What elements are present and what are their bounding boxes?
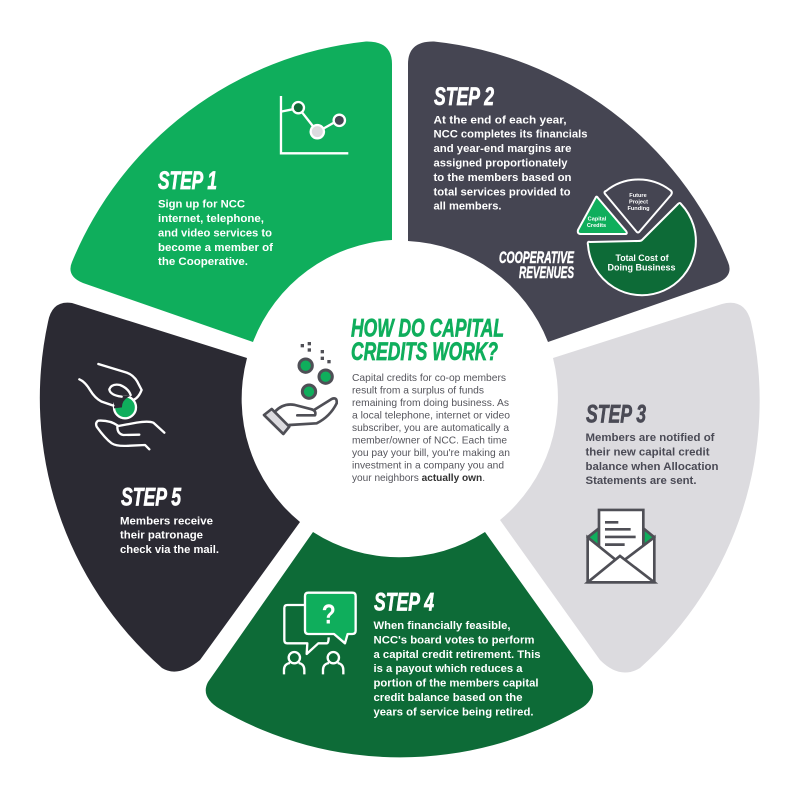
step 2 text: NCC completes its financials — [434, 129, 588, 141]
step 1 heading: STEP 1 — [158, 167, 217, 195]
step 4 heading: STEP 4 — [374, 589, 434, 617]
pie chart labels: Project — [629, 200, 648, 206]
pie chart labels: Credits — [587, 223, 606, 229]
panel: step 3 — [500, 303, 760, 672]
step 5 heading: STEP 5 — [121, 484, 182, 512]
center body text: result from a surplus of funds — [352, 386, 484, 396]
center body text: member/owner of NCC. Each time — [352, 436, 507, 446]
step 5 segment — [40, 303, 300, 672]
panel: step 1 — [70, 41, 392, 342]
step 5 text: Members receive — [120, 515, 213, 527]
center body text: your neighbors actually own. — [352, 473, 485, 484]
center body text: you pay your bill, you're making an — [352, 448, 510, 459]
pie chart labels: Future — [629, 193, 647, 199]
step 2 text: and year-end margins are — [434, 143, 572, 155]
step 4 text: When financially feasible, — [374, 620, 510, 632]
step 1 text: become a member of — [158, 242, 273, 254]
step 4 text: a capital credit retirement. This — [374, 649, 540, 661]
step 5 text: check via the mail. — [120, 544, 219, 556]
step 5 text: their patronage — [120, 530, 203, 542]
pie chart: cooperative revenues — [578, 179, 696, 295]
step 2 heading: STEP 2 — [434, 83, 494, 111]
step 2 text: to the members based on — [434, 172, 572, 184]
center body text — [352, 373, 510, 484]
step 3 text: their new capital credit — [586, 446, 710, 458]
cooperative revenues label — [499, 248, 574, 282]
step 2 segment — [408, 41, 730, 342]
slice: total cost of doing business — [588, 203, 696, 295]
step 4 segment — [206, 532, 593, 757]
pie chart labels: Capital — [588, 216, 607, 222]
step 5 text — [120, 515, 219, 556]
step 1 text: the Cooperative. — [158, 256, 248, 268]
center title: CREDITS WORK? — [351, 338, 498, 366]
step 4 text: years of service being retired. — [374, 706, 534, 718]
center body text: Capital credits for co-op members — [352, 373, 506, 384]
center body text: remaining from doing business. As — [352, 398, 509, 409]
step 1 text: internet, telephone, — [158, 213, 264, 225]
icon: hand with coins — [264, 342, 337, 434]
step 4 text: is a payout which reduces a — [374, 663, 524, 675]
step 4 text: NCC's board votes to perform — [374, 634, 534, 646]
panel: step 4 — [206, 532, 593, 757]
step 2 text: At the end of each year, — [434, 114, 566, 126]
step 2 text — [434, 114, 588, 213]
step 3 segment — [500, 303, 760, 672]
slice: future project funding — [604, 179, 672, 232]
center title — [351, 315, 504, 366]
panel: center explanation — [264, 315, 510, 484]
step 3 text — [586, 432, 718, 487]
pie chart labels: Doing Business — [608, 262, 676, 272]
cooperative revenues label: REVENUES — [519, 263, 574, 282]
icon: hands passing a coin — [79, 364, 164, 449]
icon: speech bubbles and two people — [284, 593, 356, 674]
pie chart labels — [587, 193, 676, 272]
icon: line chart — [281, 96, 348, 153]
pie chart labels: Funding — [627, 206, 650, 212]
center body text: investment in a company you and — [352, 460, 504, 472]
slice: capital credits — [578, 197, 627, 234]
step 1 text — [158, 199, 273, 268]
step 1 segment — [70, 41, 392, 342]
step 4 text: credit balance based on the — [374, 692, 522, 704]
step 3 text: Members are notified of — [586, 432, 715, 444]
step 3 text: Statements are sent. — [586, 475, 696, 487]
panel: step 5 — [40, 303, 300, 672]
pie chart labels: Total Cost of — [616, 252, 669, 263]
step 2 text: total services provided to — [434, 186, 571, 198]
step 2 text: all members. — [434, 201, 502, 213]
center title: HOW DO CAPITAL — [351, 315, 504, 343]
center body text: a local telephone, internet or video — [352, 410, 510, 422]
panel: step 2 — [408, 41, 730, 342]
step 1 text: and video services to — [158, 227, 272, 239]
icon: open envelope — [588, 510, 654, 582]
question mark: ? — [322, 598, 336, 630]
step 4 text: portion of the members capital — [374, 678, 538, 690]
step 2 text: assigned proportionately — [434, 158, 568, 170]
center body text: subscriber, you are automatically a — [352, 423, 509, 434]
step 1 text: Sign up for NCC — [158, 199, 245, 211]
step 3 text: balance when Allocation — [586, 461, 718, 473]
step 4 text — [374, 620, 540, 718]
step 3 heading: STEP 3 — [586, 401, 646, 429]
cooperative revenues label: COOPERATIVE — [499, 248, 574, 267]
